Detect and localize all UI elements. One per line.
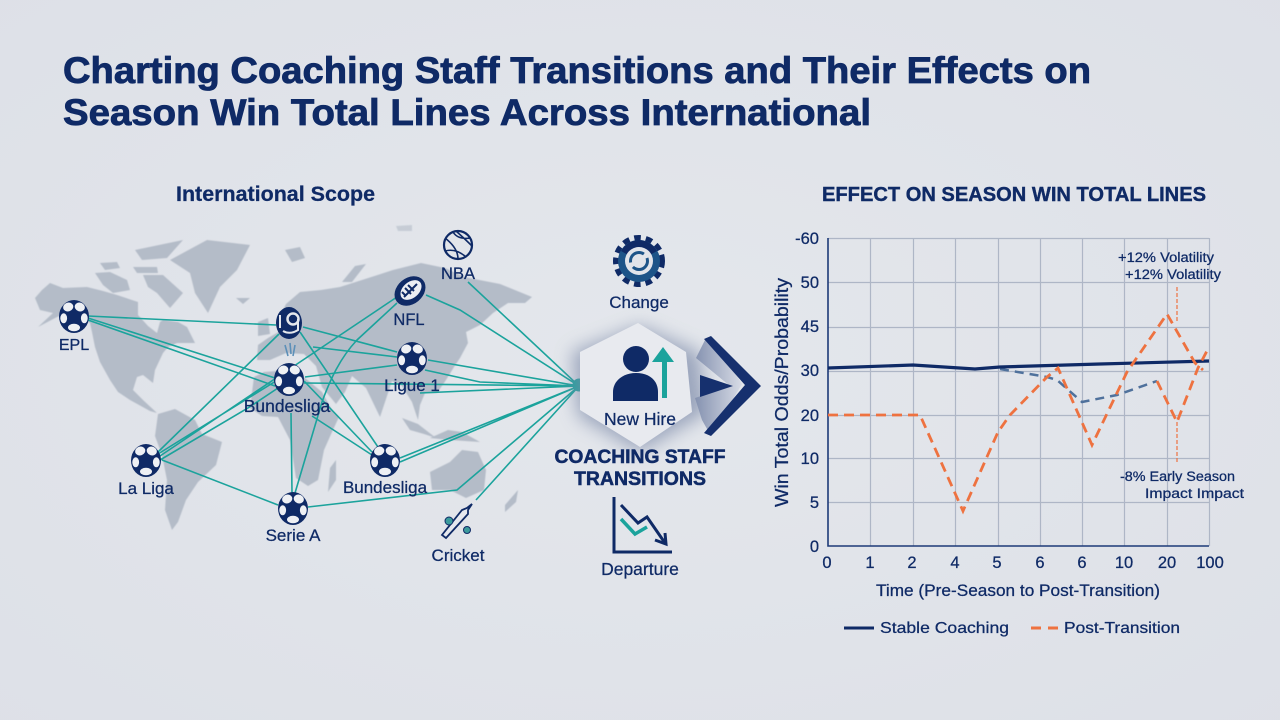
x axis labels: 0	[822, 554, 832, 572]
callout: early season: -8% Early Season	[1120, 469, 1235, 484]
x axis labels: 100	[1196, 554, 1224, 572]
legend: Stable Coaching	[880, 620, 1009, 637]
connection network	[88, 282, 579, 507]
league: NFL	[389, 270, 431, 329]
league: NBA: NBA	[441, 265, 475, 283]
league: Bundesliga center	[244, 363, 331, 416]
y axis labels: 45	[801, 318, 819, 336]
x axis labels: 6	[1077, 554, 1087, 572]
hub node	[572, 378, 586, 392]
line chart	[772, 230, 1244, 600]
heading: coaching staff transitions	[554, 447, 726, 490]
x axis title: Time (Pre-Season to Post-Transition)	[876, 582, 1160, 600]
league: Serie A	[266, 492, 321, 545]
league: EPL: EPL	[59, 337, 89, 354]
title	[63, 50, 1091, 133]
callout: early season: Impact Impact	[1145, 486, 1244, 501]
title: Season Win Total Lines Across International	[63, 92, 871, 133]
league icon: swirl	[276, 307, 302, 356]
hexagon: new hire	[572, 323, 708, 452]
y axis labels: 10	[801, 450, 819, 468]
icon: departure chart: Departure	[601, 559, 679, 579]
x axis labels: 20	[1158, 554, 1176, 572]
callout: volatility: +12% Volatility	[1118, 250, 1214, 265]
heading: coaching staff transitions: TRANSITIONS	[574, 469, 706, 490]
icon: change gear: Change	[609, 293, 669, 312]
post-transition series	[828, 314, 1209, 511]
y axis labels: 30	[801, 362, 819, 380]
title: Charting Coaching Staff Transitions and Their Effects on	[63, 50, 1091, 91]
league: Serie A: Serie A	[266, 526, 321, 545]
grid	[828, 238, 1210, 546]
legend: Post-Transition	[1064, 620, 1180, 637]
y axis labels: 5	[810, 494, 819, 512]
heading: international scope: International Scope	[176, 183, 375, 206]
x axis labels	[822, 554, 1224, 572]
callout: early season	[1120, 469, 1244, 501]
league: NFL: NFL	[393, 311, 425, 329]
callout: volatility: +12% Volatility	[1125, 267, 1221, 282]
x axis labels: 10	[1115, 554, 1133, 572]
league: Ligue 1	[384, 342, 440, 395]
heading: coaching staff transitions: COACHING STAFF	[554, 447, 726, 468]
icon: change gear	[609, 238, 669, 312]
league: Bundesliga center: Bundesliga	[244, 396, 331, 416]
x axis labels: 2	[907, 554, 917, 572]
volatility marker	[1176, 287, 1178, 464]
world map	[35, 225, 532, 530]
y axis title: Win Total Odds/Probability	[772, 278, 792, 507]
y axis labels	[795, 230, 819, 556]
blue dashed series	[1000, 369, 1157, 402]
league: EPL	[59, 300, 89, 354]
league: NBA	[441, 231, 475, 283]
chevron arrow	[695, 336, 761, 436]
league: Cricket: Cricket	[432, 546, 485, 565]
heading: effect on lines: EFFECT ON SEASON WIN TOTAL LINES	[822, 183, 1206, 206]
callout: volatility	[1118, 250, 1221, 282]
y axis labels: 0	[810, 538, 819, 556]
league: Cricket	[432, 504, 485, 565]
hexagon: new hire: New Hire	[604, 409, 676, 429]
league: Bundesliga right	[343, 444, 428, 497]
stable coaching line	[828, 361, 1209, 369]
x axis labels: 4	[950, 554, 960, 572]
league: Bundesliga right: Bundesliga	[343, 478, 428, 497]
axes	[828, 238, 1209, 546]
icon: departure chart	[601, 497, 679, 579]
y axis labels: 20	[801, 407, 819, 425]
y axis labels: 50	[801, 274, 819, 292]
y axis labels: -60	[795, 230, 819, 248]
league: Ligue 1: Ligue 1	[384, 376, 440, 395]
x axis labels: 5	[992, 554, 1002, 572]
league: La Liga	[118, 444, 174, 498]
icon: person with up arrow	[613, 346, 674, 401]
x axis labels: 1	[865, 554, 875, 572]
legend	[844, 620, 1180, 637]
x axis labels: 6	[1035, 554, 1045, 572]
league: La Liga: La Liga	[118, 479, 174, 498]
